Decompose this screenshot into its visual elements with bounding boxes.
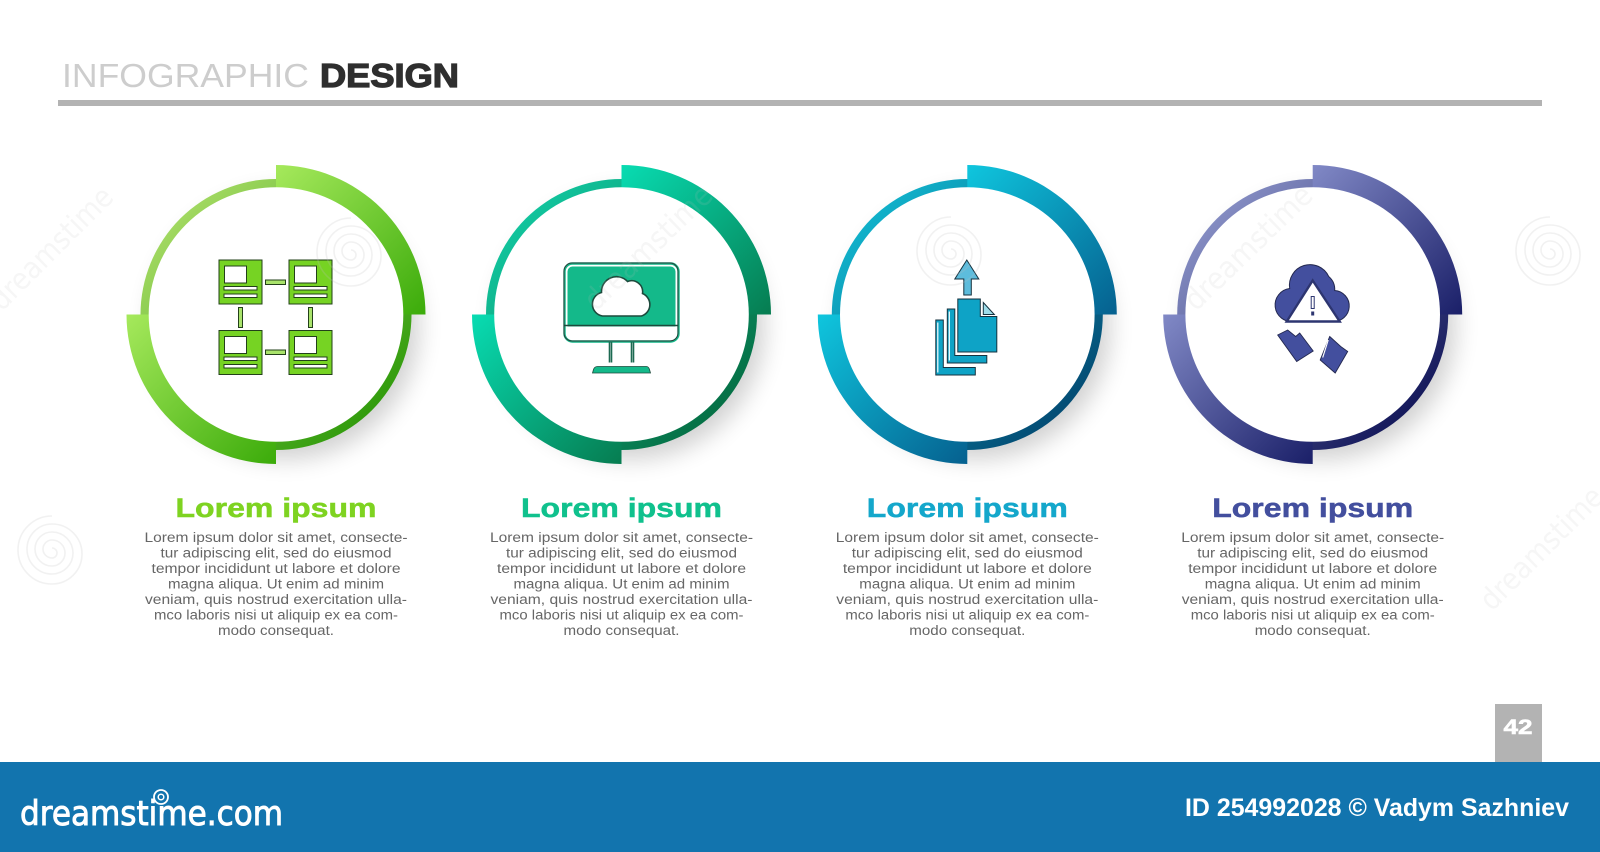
- icon: connected blocks: [219, 260, 332, 374]
- text block: tur adipiscing elit, sed do eiusmod: [506, 546, 737, 560]
- page number tab: [1495, 704, 1542, 762]
- text block: tur adipiscing elit, sed do eiusmod: [160, 546, 392, 560]
- text block: magna aliqua. Ut enim ad minim: [514, 576, 730, 592]
- text block: mco laboris nisi ut aliquip ex ea com-: [845, 608, 1089, 622]
- page number tab: 42: [1504, 715, 1533, 739]
- heading: Lorem ipsum: [867, 493, 1068, 523]
- footer banner: [0, 762, 1600, 852]
- icon: files with up arrow: [936, 260, 997, 375]
- text block: mco laboris nisi ut aliquip ex ea com-: [1191, 608, 1435, 622]
- panel: step 1 network: [126, 165, 426, 638]
- panel: step 3 file upload: [818, 165, 1117, 638]
- ring: indigo: [1163, 165, 1462, 464]
- text block: Lorem ipsum dolor sit amet, consecte-: [1181, 530, 1444, 545]
- text block: magna aliqua. Ut enim ad minim: [1205, 576, 1421, 592]
- ring: cyan: [818, 165, 1117, 464]
- text block: [1181, 530, 1444, 638]
- image id and credit: ID 254992028 © Vadym Sazhniev: [1185, 794, 1569, 822]
- text block: Lorem ipsum dolor sit amet, consecte-: [144, 530, 408, 545]
- text block: modo consequat.: [1255, 623, 1371, 638]
- text block: mco laboris nisi ut aliquip ex ea com-: [154, 608, 398, 622]
- text block: modo consequat.: [218, 623, 334, 638]
- text block: magna aliqua. Ut enim ad minim: [859, 576, 1075, 592]
- icon: cloud warning with broken files: [1275, 265, 1349, 373]
- text block: tempor incididunt ut labore et dolore: [497, 561, 746, 576]
- title: INFOGRAPHIC: [62, 58, 309, 95]
- ring: teal: [472, 165, 771, 464]
- panel: step 2 cloud monitor: [472, 165, 771, 638]
- text block: veniam, quis nostrud exercitation ulla-: [836, 592, 1098, 607]
- text block: [144, 530, 408, 638]
- watermark spirals and text: dreamstime: [577, 178, 720, 318]
- text block: magna aliqua. Ut enim ad minim: [168, 576, 384, 592]
- heading: Lorem ipsum: [521, 493, 722, 523]
- title: DESIGN: [320, 58, 459, 95]
- heading: Lorem ipsum: [176, 493, 376, 523]
- icon: cloud on monitor: [564, 263, 678, 373]
- text block: tempor incididunt ut labore et dolore: [1188, 561, 1437, 576]
- logo: dreamstime: dreamstime.com: [20, 794, 283, 834]
- text block: veniam, quis nostrud exercitation ulla-: [1182, 592, 1444, 607]
- text block: tempor incididunt ut labore et dolore: [843, 561, 1092, 576]
- text block: mco laboris nisi ut aliquip ex ea com-: [500, 608, 743, 622]
- text block: [836, 530, 1099, 638]
- title: [62, 58, 459, 95]
- ring: green: [126, 165, 426, 464]
- text block: tur adipiscing elit, sed do eiusmod: [1197, 546, 1428, 560]
- text block: Lorem ipsum dolor sit amet, consecte-: [836, 530, 1099, 545]
- text block: modo consequat.: [563, 623, 680, 638]
- text block: tur adipiscing elit, sed do eiusmod: [852, 546, 1083, 560]
- watermark spirals and text: [0, 178, 1600, 618]
- watermark spirals and text: dreamstime: [1177, 178, 1320, 318]
- text block: veniam, quis nostrud exercitation ulla-: [490, 592, 752, 607]
- heading: Lorem ipsum: [1212, 493, 1413, 523]
- panel: step 4 cloud warning: [1163, 165, 1462, 638]
- text block: tempor incididunt ut labore et dolore: [152, 561, 400, 576]
- text block: [490, 530, 753, 638]
- text block: modo consequat.: [909, 623, 1025, 638]
- text block: Lorem ipsum dolor sit amet, consecte-: [490, 530, 753, 545]
- text block: veniam, quis nostrud exercitation ulla-: [145, 592, 407, 607]
